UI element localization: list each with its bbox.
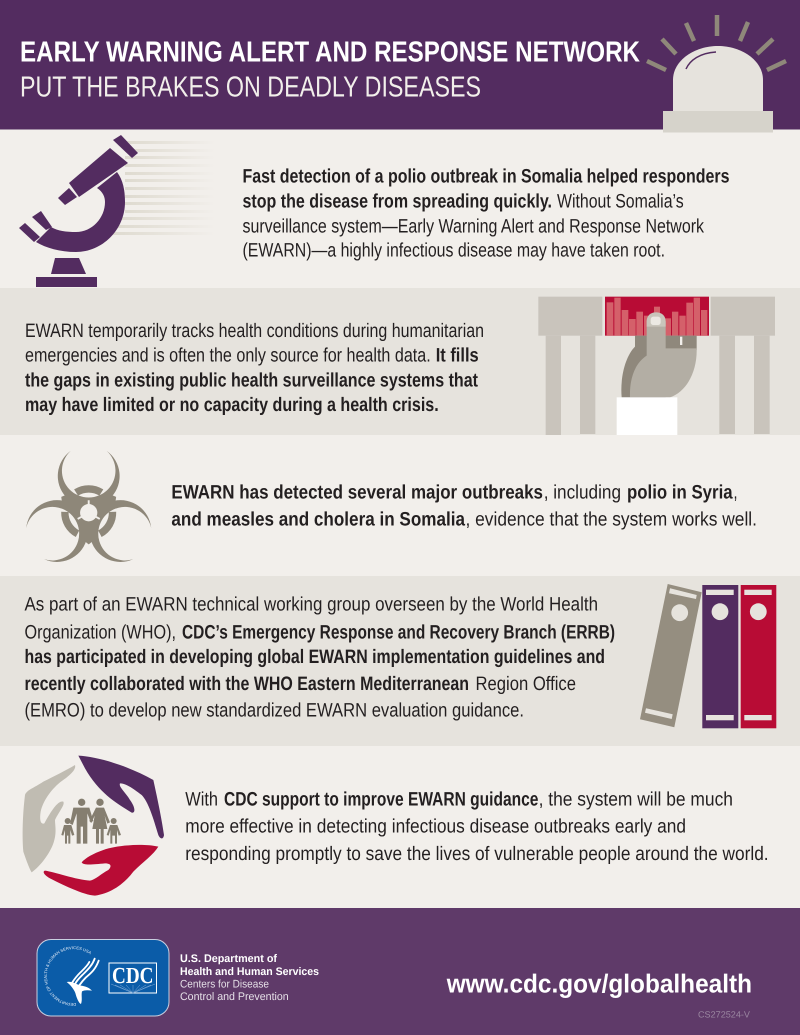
icon: biohazard symbol <box>20 451 158 570</box>
agency name: U.S. Department of <box>180 953 277 965</box>
text block: CDC support <box>185 789 769 865</box>
text block: CDC working group: As part of an EWARN technical working group overseen by the World Health <box>24 594 598 616</box>
text block: EWARN tracking <box>25 320 484 416</box>
text block: polio detection: (EWARN)—a highly infectious disease may have taken root. <box>242 240 665 262</box>
text block: outbreaks detected <box>171 481 757 531</box>
text block: EWARN tracking: may have limited or no capacity during a health crisis. <box>25 394 439 416</box>
icon: hands protecting family <box>23 756 164 896</box>
text block: polio detection: stop the disease from spreading quickly. <box>242 191 552 213</box>
icon: alarm light <box>647 15 786 132</box>
agency name: Centers for Disease <box>180 979 269 991</box>
text block: EWARN tracking: It fills <box>436 345 479 367</box>
text block: polio detection: surveillance system—Early Warning Alert and Response Network <box>242 215 704 237</box>
subtitle: PUT THE BRAKES ON DEADLY DISEASES <box>20 72 481 104</box>
text block: CDC working group: recently collaborated with the WHO Eastern Mediterranean <box>24 673 469 695</box>
agency name: Health and Human Services <box>180 966 319 978</box>
text block: outbreaks detected: and measles and cholera in Somalia <box>171 509 465 531</box>
text block: CDC support: , the system will be much <box>539 789 733 811</box>
text block: CDC support: With <box>185 789 218 811</box>
text block: EWARN tracking: EWARN temporarily tracks health conditions during humanitarian <box>25 320 484 342</box>
text block: CDC working group: Organization (WHO), <box>24 621 176 643</box>
text block: outbreaks detected: EWARN has detected several major outbreaks <box>171 481 543 503</box>
text block: outbreaks detected: , including <box>544 481 621 503</box>
CDC HHS logo <box>36 939 170 1016</box>
document code: CS272524-V <box>698 1010 750 1020</box>
agency name: Control and Prevention <box>180 991 289 1003</box>
icon: three binders <box>640 584 776 728</box>
text block: outbreaks detected: polio in Syria <box>627 481 733 503</box>
text block: CDC working group: CDC’s Emergency Response and Recovery Branch (ERRB) <box>182 621 615 643</box>
agency name <box>180 953 319 1003</box>
text block: outbreaks detected: , <box>734 481 738 503</box>
text block: EWARN tracking: the gaps in existing public health surveillance systems that <box>25 370 478 392</box>
icon: hand pressing button on chart panel <box>538 297 775 435</box>
text block: EWARN tracking: emergencies and is often the only source for health data. <box>25 345 431 367</box>
footer band <box>0 908 800 1035</box>
icon: microscope <box>19 135 215 287</box>
title: EARLY WARNING ALERT AND RESPONSE NETWORK <box>20 37 640 69</box>
text block: polio detection <box>242 166 730 262</box>
text block: CDC support: more effective in detecting infectious disease outbreaks early and <box>185 816 686 838</box>
text block: CDC working group: Region Office <box>476 673 576 695</box>
text block: CDC working group: has participated in developing global EWARN implementation guidelines and <box>24 646 605 668</box>
text block: polio detection: Without Somalia’s <box>557 191 684 213</box>
text block: CDC working group: (EMRO) to develop new standardized EWARN evaluation guidance. <box>24 700 524 722</box>
text block: CDC support: CDC support to improve EWARN guidance <box>224 789 539 811</box>
header band <box>0 0 800 130</box>
CDC HHS logo: DEPARTMENT OF HEALTH & HUMAN SERVICES USA <box>44 946 91 1006</box>
text block: outbreaks detected: , evidence that the system works well. <box>466 509 757 531</box>
CDC HHS logo: CDC <box>112 963 154 988</box>
text block: CDC working group <box>24 594 615 722</box>
website URL: www.cdc.gov/globalhealth <box>446 969 752 999</box>
